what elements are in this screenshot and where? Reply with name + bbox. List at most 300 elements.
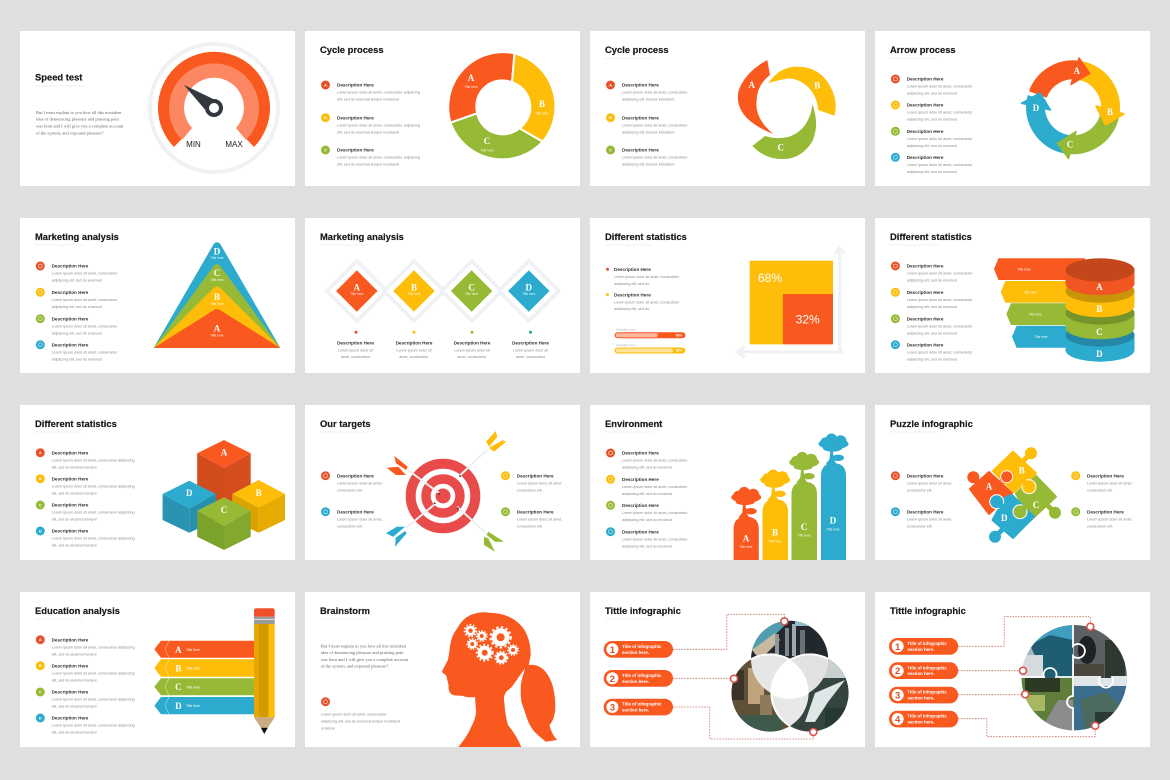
list item right bottom: Lorem ipsum dolor sit amet, bbox=[517, 517, 562, 521]
marker 3 bbox=[1022, 691, 1029, 698]
panel: marketing diamonds bbox=[305, 218, 580, 373]
list item A bbox=[606, 80, 688, 102]
list item D: Description Here bbox=[52, 716, 89, 721]
list item left bottom bbox=[321, 507, 382, 528]
illustration: head silhouette with gears bbox=[442, 612, 557, 747]
chart: tree bar D: Title here bbox=[826, 528, 840, 532]
text block: speed test intro: idea of denouncing pleasure and praising pain bbox=[36, 117, 119, 122]
callout pill 1: Title of infographic bbox=[907, 641, 947, 646]
marker 4 bbox=[1092, 722, 1099, 729]
list item A: elit, sed do eiusmod tempor bbox=[52, 652, 98, 656]
list item B bbox=[606, 475, 688, 496]
list item A: A bbox=[39, 451, 42, 455]
list item C: Lorem ipsum dolor sit amet, consectetur bbox=[622, 156, 688, 160]
text block: brainstorm intro: of the system, and expound pleasure? bbox=[321, 664, 388, 670]
chart: layered pyramid: Title here bbox=[210, 256, 224, 260]
list item C bbox=[36, 688, 135, 709]
list item B: Description Here bbox=[337, 115, 374, 120]
panel: marketing pyramid bbox=[20, 218, 295, 373]
heading: brainstorm: Brainstorm bbox=[320, 605, 370, 616]
list item D: Description Here bbox=[622, 529, 659, 534]
callout pill 4: Title of infographic bbox=[907, 714, 947, 719]
callout pill 1 bbox=[604, 641, 673, 658]
list item B: adipiscing elit, sed do eiusmod bbox=[52, 305, 102, 309]
callout pill 3: section here. bbox=[907, 696, 934, 700]
list item right top: Lorem ipsum dolor sit amet, bbox=[517, 481, 562, 485]
list item C: Description Here bbox=[337, 148, 374, 153]
list item D: Lorem ipsum dolor sit amet, consectetur bbox=[907, 350, 973, 354]
list item B: Lorem ipsum dolor sit amet, consectetur bbox=[622, 123, 688, 127]
list item A: A bbox=[39, 638, 42, 642]
list item C: adipiscing elit, sed do eiusmod bbox=[907, 144, 957, 148]
list item D: Description Here bbox=[907, 342, 944, 347]
list item right bottom bbox=[1071, 507, 1132, 528]
heading: puzzle infographic: Puzzle infographic bbox=[890, 418, 973, 429]
list item D: adipiscing elit, sed do eiusmod bbox=[52, 357, 102, 361]
list item C bbox=[606, 146, 688, 167]
chart: stacked cylinder: B bbox=[1096, 304, 1102, 314]
panel: title infographic venn bbox=[590, 592, 865, 747]
list item B: Lorem ipsum dolor sit amet, consectetur bbox=[622, 485, 688, 489]
list item C: C bbox=[39, 503, 42, 507]
list item right top: consectetur elit. bbox=[517, 488, 543, 492]
caption D: Lorem ipsum dolor sit bbox=[513, 348, 548, 352]
panel: environment bbox=[590, 405, 865, 560]
caption A: Lorem ipsum dolor sit bbox=[338, 348, 373, 352]
list item A: elit, sed do eiusmod tempor bbox=[52, 465, 98, 469]
callout pill 3: 3 bbox=[610, 702, 615, 714]
chart: nested squares bbox=[750, 261, 833, 344]
list item B: B bbox=[39, 477, 42, 481]
list item B: Lorem ipsum dolor sit amet, consectetur bbox=[52, 298, 118, 302]
chart: stacked cylinder: C bbox=[1096, 327, 1103, 337]
list item B: adipiscing elit, tempor incididunt bbox=[622, 130, 674, 134]
list item D bbox=[36, 526, 135, 548]
list item D: adipiscing elit, sed do eiusmod bbox=[907, 170, 957, 174]
list item A bbox=[36, 262, 118, 283]
list item C: Lorem ipsum dolor sit amet, consectetur adipiscing bbox=[52, 698, 135, 702]
list item B: Description Here bbox=[52, 290, 89, 295]
text block: brainstorm intro bbox=[321, 643, 409, 670]
marker 2 bbox=[730, 675, 738, 682]
chart: tree bar C: Title here bbox=[797, 534, 811, 538]
chart: swirl arrows: A bbox=[748, 80, 755, 90]
connector lines bbox=[673, 614, 813, 739]
chart: isometric cubes bbox=[163, 440, 285, 550]
icon: pencil bbox=[254, 608, 275, 734]
cube A: A bbox=[221, 448, 228, 458]
arrow ribbons: Title here bbox=[1024, 290, 1037, 294]
caption B bbox=[396, 331, 433, 359]
list item A: adipiscing elit, sed do eiusmod bbox=[907, 92, 957, 96]
ribbon A: A bbox=[175, 645, 182, 655]
list item C: adipiscing elit, sed do eiusmod bbox=[907, 331, 957, 335]
heading: different statistics: Different statistics bbox=[35, 418, 117, 429]
chart: layered pyramid bbox=[154, 242, 280, 348]
marker 1 bbox=[1087, 623, 1094, 630]
list item C: Lorem ipsum dolor sit amet, consectetur bbox=[52, 324, 118, 328]
heading: tittle infographic: Tittle infographic bbox=[605, 605, 681, 616]
list item C: elit, sed do eiusmod tempor incididunt bbox=[337, 163, 399, 167]
cube D: D bbox=[186, 488, 193, 498]
heading: marketing analysis: Marketing analysis bbox=[35, 231, 119, 242]
list item D: Lorem ipsum dolor sit amet, consectetur adipiscing bbox=[52, 537, 135, 541]
list item A: adipiscing elit, sed do eiusmod bbox=[622, 466, 672, 470]
list item A bbox=[606, 448, 688, 470]
diamond D: Title here bbox=[522, 292, 536, 296]
callout pill 3 bbox=[889, 687, 958, 703]
chart: layered pyramid: Title here bbox=[210, 278, 224, 282]
callout pill 2: 2 bbox=[610, 674, 615, 685]
photo venn diagram bbox=[730, 620, 851, 735]
list item C: Lorem ipsum dolor sit amet, consectetur bbox=[907, 137, 973, 141]
list item D: Description Here bbox=[907, 155, 944, 160]
text block: speed test intro bbox=[36, 110, 124, 136]
panel: puzzle infographic bbox=[875, 405, 1150, 560]
list item C: adipiscing elit, tempor incididunt bbox=[622, 163, 674, 167]
list item C bbox=[891, 127, 973, 148]
list item A: Lorem ipsum dolor sit amet, consectetur bbox=[907, 272, 973, 276]
list item D bbox=[606, 527, 688, 548]
list item B: Description Here bbox=[52, 476, 89, 481]
list item A bbox=[891, 262, 973, 283]
list item one: Description Here bbox=[614, 267, 651, 272]
list item B: B bbox=[39, 664, 42, 668]
ribbon B bbox=[154, 659, 254, 677]
list item right bottom: Lorem ipsum dolor sit amet, bbox=[1087, 517, 1132, 521]
diamond D: D bbox=[526, 282, 533, 292]
chart: tree bar D bbox=[818, 434, 848, 560]
list item A: A bbox=[609, 83, 612, 87]
heading: education analysis: Education analysis bbox=[35, 605, 120, 616]
ribbon B: B bbox=[175, 664, 181, 674]
list item D: Lorem ipsum dolor sit amet, consectetur bbox=[622, 537, 688, 541]
chart: tree bar A bbox=[731, 487, 761, 560]
heading: cycle process: Cycle process bbox=[605, 44, 669, 55]
chart: circular arrows bbox=[1022, 58, 1124, 158]
caption C: amet, consectetur bbox=[457, 355, 487, 359]
panel: title infographic puzzle photo bbox=[875, 592, 1150, 747]
chart: layered pyramid: C bbox=[214, 268, 220, 278]
list item B: adipiscing elit, sed do eiusmod bbox=[907, 305, 957, 309]
list item B: elit, sed do eiusmod tempor incididunt bbox=[337, 130, 399, 134]
list item right top: Lorem ipsum dolor sit amet, bbox=[1087, 481, 1132, 485]
callout pill 2: section here. bbox=[907, 671, 934, 676]
photo: mountain river bbox=[790, 659, 849, 732]
caption A: amet, consectetur bbox=[341, 355, 371, 359]
chart: swirl arrows: B bbox=[814, 81, 820, 91]
arrow ribbons: Title here bbox=[1029, 312, 1042, 316]
panel: different statistics cylinder bbox=[875, 218, 1150, 373]
list item A bbox=[891, 74, 973, 96]
list item C: elit, sed do eiusmod tempor bbox=[52, 705, 98, 709]
chart: jigsaw puzzle bbox=[968, 448, 1060, 542]
callout pill 3 bbox=[604, 699, 673, 715]
chart: tree bar B bbox=[760, 470, 790, 560]
photo: lake bbox=[1074, 678, 1128, 731]
marker 2 bbox=[1020, 667, 1026, 674]
list item D: adipiscing elit, sed do eiusmod bbox=[907, 357, 957, 361]
caption D: Description Here bbox=[512, 340, 549, 345]
photo puzzle circle bbox=[1021, 625, 1128, 731]
list item one: Lorem ipsum dolor sit amet, consectetur bbox=[614, 275, 680, 279]
callout pill 1 bbox=[889, 638, 958, 655]
chart: speedometer gauge bbox=[150, 44, 278, 172]
icon: gauge needle bbox=[184, 85, 223, 117]
diamond A bbox=[327, 261, 387, 321]
caption C: Description Here bbox=[454, 340, 491, 345]
chart: tree bar C bbox=[789, 452, 819, 560]
list item right bottom: consectetur elit. bbox=[517, 524, 543, 528]
arrow ribbons bbox=[994, 258, 1085, 348]
list item C: Lorem ipsum dolor sit amet, consectetur bbox=[622, 511, 688, 515]
list item D: Lorem ipsum dolor sit amet, consectetur bbox=[52, 350, 118, 354]
chart: tree bar B: B bbox=[772, 528, 778, 538]
callout pill 3: section here. bbox=[622, 707, 649, 712]
caption C bbox=[454, 331, 491, 359]
chart: stacked cylinder: D bbox=[1096, 349, 1103, 359]
chart: circular arrows: C bbox=[1067, 140, 1073, 150]
chart: tree bar D: D bbox=[830, 516, 837, 526]
list item two bbox=[606, 292, 680, 311]
list item two: adipiscing elit, sed do bbox=[614, 307, 649, 311]
donut labels: Title here bbox=[464, 85, 478, 89]
list item B: Lorem ipsum dolor sit amet, consectetur bbox=[907, 298, 973, 302]
list item D: Description Here bbox=[52, 342, 89, 347]
list item B bbox=[321, 113, 420, 134]
caption A bbox=[337, 331, 374, 359]
list item one: adipiscing elit, sed do bbox=[614, 282, 649, 286]
list item B: Description Here bbox=[907, 290, 944, 295]
puzzle piece C bbox=[1016, 476, 1060, 520]
arrow: horizontal axis bbox=[737, 347, 843, 357]
panel: different statistics squares bbox=[590, 218, 865, 373]
list item B: Lorem ipsum dolor sit amet, consectetur adipiscing bbox=[52, 671, 135, 675]
chart: jigsaw puzzle: C bbox=[1033, 500, 1039, 510]
panel: cycle process swirl bbox=[590, 31, 865, 186]
list item B: Description Here bbox=[52, 663, 89, 668]
list item B: Lorem ipsum dolor sit amet, consectetur adipiscing bbox=[337, 123, 420, 127]
list item left top: consectetur elit. bbox=[337, 488, 363, 492]
caption B: Lorem ipsum dolor sit bbox=[396, 348, 432, 352]
list item left bottom: Description Here bbox=[337, 509, 374, 514]
donut labels bbox=[464, 73, 549, 152]
arrow ribbons: Title here bbox=[1017, 268, 1031, 272]
heading: cycle process: Cycle process bbox=[320, 44, 384, 55]
arrow ribbons: Title here bbox=[1034, 335, 1048, 339]
callout pill 4 bbox=[889, 711, 958, 727]
list item two: Description Here bbox=[614, 292, 651, 297]
callout pill 2: 2 bbox=[895, 666, 900, 677]
list item right top bbox=[1071, 471, 1132, 492]
list item A: adipiscing elit, tempor incididunt bbox=[622, 98, 674, 102]
chart: circular arrows: B bbox=[1107, 107, 1113, 117]
list item two: Lorem ipsum dolor sit amet, consectetur bbox=[614, 300, 680, 304]
text block: brainstorm note: Lorem ipsum dolor sit amet, consectetur bbox=[321, 713, 387, 717]
list item right top: Description Here bbox=[1087, 473, 1124, 478]
chart: layered pyramid: A bbox=[214, 324, 221, 334]
connector lines bbox=[958, 617, 1095, 737]
heading: tittle infographic: Tittle infographic bbox=[890, 605, 966, 616]
diamond D bbox=[499, 261, 559, 321]
list item A bbox=[321, 80, 420, 102]
list item A: Description Here bbox=[907, 264, 944, 269]
callout pill 3: 3 bbox=[895, 690, 900, 702]
list item right bottom bbox=[501, 507, 562, 528]
list item left bottom: consectetur elit. bbox=[907, 524, 933, 528]
list item B: B bbox=[609, 116, 612, 120]
arrow: bottom left blue bbox=[386, 504, 435, 547]
ribbon A bbox=[154, 641, 254, 658]
text block: speed test intro: was born and I will give you a complete account bbox=[36, 124, 124, 129]
donut labels: Title here bbox=[535, 112, 549, 116]
list item B: elit, sed do eiusmod tempor bbox=[52, 491, 98, 495]
caption D bbox=[512, 331, 549, 359]
callout pill 2 bbox=[604, 670, 673, 687]
list item D: Lorem ipsum dolor sit amet, consectetur adipiscing bbox=[52, 724, 135, 728]
progress bar orange: Description here bbox=[616, 328, 636, 332]
arrow: bottom right green bbox=[457, 507, 504, 552]
list item left bottom: Lorem ipsum dolor sit amet, bbox=[337, 517, 382, 521]
list item A: adipiscing elit, sed do eiusmod bbox=[52, 279, 102, 283]
list item left top: Description Here bbox=[907, 473, 944, 478]
callout pill 1: 1 bbox=[610, 645, 616, 656]
list item D: elit, sed do eiusmod tempor bbox=[52, 731, 98, 735]
callout pill 2 bbox=[889, 662, 958, 679]
diamond B: B bbox=[411, 282, 417, 292]
list item C: Description Here bbox=[622, 503, 659, 508]
list item B: adipiscing elit, sed do eiusmod bbox=[907, 118, 957, 122]
list item right bottom: Description Here bbox=[517, 509, 554, 514]
ribbon A: Title here bbox=[186, 648, 200, 652]
list item B: Description Here bbox=[622, 115, 659, 120]
heading: different statistics: Different statistics bbox=[605, 231, 687, 242]
ribbon D bbox=[154, 697, 254, 714]
chart: jigsaw puzzle: A bbox=[986, 482, 993, 492]
text block: brainstorm intro: idea of denouncing pleasure and praising pain bbox=[321, 650, 404, 655]
list item C bbox=[36, 500, 135, 522]
list item A: Description Here bbox=[907, 77, 944, 82]
text block: brainstorm note bbox=[321, 713, 400, 731]
chart: layered pyramid: Title here bbox=[210, 334, 224, 338]
list item A: Description Here bbox=[52, 450, 89, 455]
list item A: Lorem ipsum dolor sit amet, consectetur bbox=[622, 91, 688, 95]
callout pill 1: section here. bbox=[907, 647, 934, 652]
list item A: Lorem ipsum dolor sit amet, consectetur bbox=[52, 272, 118, 276]
list item D bbox=[891, 153, 973, 174]
list item D: D bbox=[39, 529, 42, 533]
list item left bottom: consectetur elit. bbox=[337, 524, 363, 528]
list item left top: Lorem ipsum dolor sit amet, bbox=[337, 481, 382, 485]
chart: tree bar B: Title here bbox=[768, 540, 782, 544]
venn overlaps bbox=[751, 653, 828, 726]
panel: education analysis bbox=[20, 592, 295, 747]
list item A: Description Here bbox=[622, 83, 659, 88]
callout pill 1: 1 bbox=[895, 642, 901, 653]
list item A: Description Here bbox=[337, 83, 374, 88]
diamond C: C bbox=[468, 282, 475, 292]
chart: layered pyramid: D bbox=[214, 246, 221, 256]
text block: speed test intro: of the system, and expound pleasure? bbox=[36, 130, 103, 136]
list item A bbox=[36, 635, 135, 656]
callout pill 4: section here. bbox=[907, 720, 934, 724]
list item B bbox=[36, 474, 135, 495]
list item B bbox=[36, 288, 118, 309]
list item left top: Description Here bbox=[337, 473, 374, 478]
chart: tree bar C: C bbox=[801, 522, 807, 532]
list item right top: consectetur elit. bbox=[1087, 488, 1113, 492]
chart: jigsaw puzzle: B bbox=[1019, 466, 1025, 476]
list item A: Description Here bbox=[52, 637, 89, 642]
diamond A: Title here bbox=[350, 292, 364, 296]
panel: different statistics cubes bbox=[20, 405, 295, 560]
heading: environment: Environment bbox=[605, 418, 662, 429]
arrow: top left orange bbox=[387, 456, 439, 493]
list item left top: consectetur elit. bbox=[907, 488, 933, 492]
list item C: C bbox=[39, 690, 42, 694]
photo: forest road bbox=[1021, 678, 1074, 731]
ribbon C bbox=[154, 678, 254, 695]
diamond A: A bbox=[354, 282, 361, 292]
marker 3 bbox=[810, 728, 817, 736]
list item B: Lorem ipsum dolor sit amet, consectetur bbox=[907, 111, 973, 115]
list item left bottom: Lorem ipsum dolor sit amet, bbox=[907, 517, 952, 521]
ribbon B: Title here bbox=[186, 666, 200, 670]
list item B bbox=[891, 288, 973, 309]
list item B: Description Here bbox=[622, 477, 659, 482]
list item C: adipiscing elit, sed do eiusmod bbox=[622, 518, 672, 522]
diamond B bbox=[384, 261, 444, 321]
chart: layered pyramid: B bbox=[214, 292, 220, 302]
puzzle piece A bbox=[968, 472, 1012, 514]
list item A bbox=[36, 448, 135, 469]
list item C: Description Here bbox=[52, 316, 89, 321]
text block: speed test intro: But I must explain to you how all this mistaken bbox=[36, 110, 122, 115]
gauge maximum label: MAX bbox=[225, 140, 243, 149]
list item C bbox=[36, 314, 118, 335]
ribbon C: C bbox=[175, 682, 182, 692]
text block: brainstorm note: adipiscing elit, sed do eiusmod tempor incididunt bbox=[321, 720, 400, 724]
list item A: A bbox=[324, 83, 327, 87]
list item C: Description Here bbox=[907, 316, 944, 321]
progress bar yellow: Description here bbox=[616, 343, 636, 347]
icon: large gear bbox=[490, 627, 511, 648]
ribbon C: Title here bbox=[186, 685, 200, 689]
list item C bbox=[321, 146, 420, 167]
list item C: Description Here bbox=[622, 148, 659, 153]
callout pill 2: Title of infographic bbox=[622, 673, 662, 678]
text block: brainstorm intro: But I must explain to you how all this mistaken bbox=[321, 643, 407, 648]
caption B: Description Here bbox=[396, 340, 433, 345]
chart: swirl arrows: C bbox=[777, 142, 784, 152]
list item B bbox=[36, 661, 135, 682]
chart: circular arrows: D bbox=[1033, 103, 1040, 113]
puzzle piece B bbox=[993, 448, 1036, 492]
chart: nested squares: 68% bbox=[758, 271, 782, 285]
photo: city skyline bbox=[751, 620, 828, 659]
callout pill 4: 4 bbox=[895, 714, 901, 726]
puzzle piece D bbox=[990, 495, 1034, 542]
list item A: Lorem ipsum dolor sit amet, consectetur bbox=[907, 85, 973, 89]
callout pill 2: section here. bbox=[622, 679, 649, 684]
chart: tree bar A: A bbox=[743, 534, 750, 544]
heading: different statistics: Different statistics bbox=[890, 231, 972, 242]
caption D: amet, consectetur bbox=[516, 355, 546, 359]
ribbon D: D bbox=[175, 701, 182, 711]
list item left bottom: Description Here bbox=[907, 509, 944, 514]
chart: tree bar A: Title here bbox=[739, 545, 753, 549]
list item B: B bbox=[324, 116, 327, 120]
